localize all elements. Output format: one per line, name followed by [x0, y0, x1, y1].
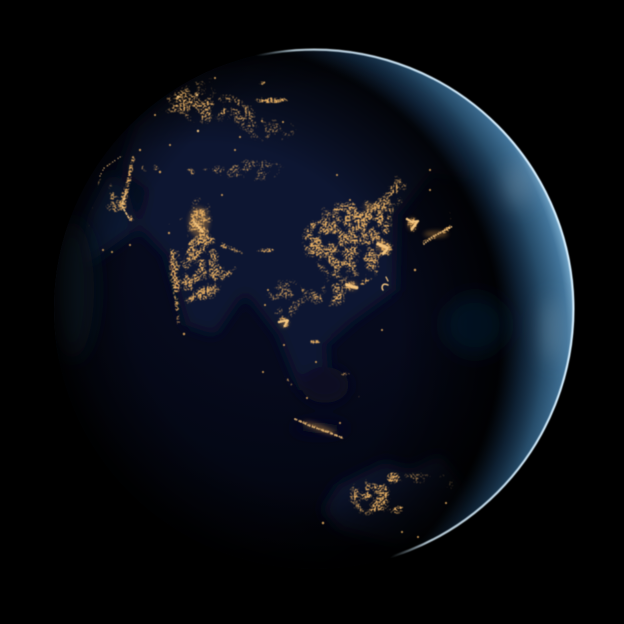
globe [50, 49, 574, 569]
illustration: Earth at night [54, 48, 576, 557]
land masses [87, 66, 448, 533]
lights: broad regions [101, 68, 460, 519]
city lights [87, 68, 460, 538]
ocean base [80, 133, 477, 530]
bright atmospheric limb [55, 50, 573, 568]
terminator shadow [156, 51, 514, 544]
lights: bright coastlines and cities [100, 95, 453, 438]
daylight crescent [296, 50, 574, 541]
lights: scattered small towns [102, 77, 447, 538]
lights: glow halos [189, 204, 448, 437]
clouds on daylit side [443, 163, 561, 362]
western limb darkening [54, 74, 390, 547]
lights: fine coasts and cities [87, 80, 453, 515]
africa at the western limb [54, 232, 94, 343]
lights: speckled city regions [87, 68, 460, 519]
